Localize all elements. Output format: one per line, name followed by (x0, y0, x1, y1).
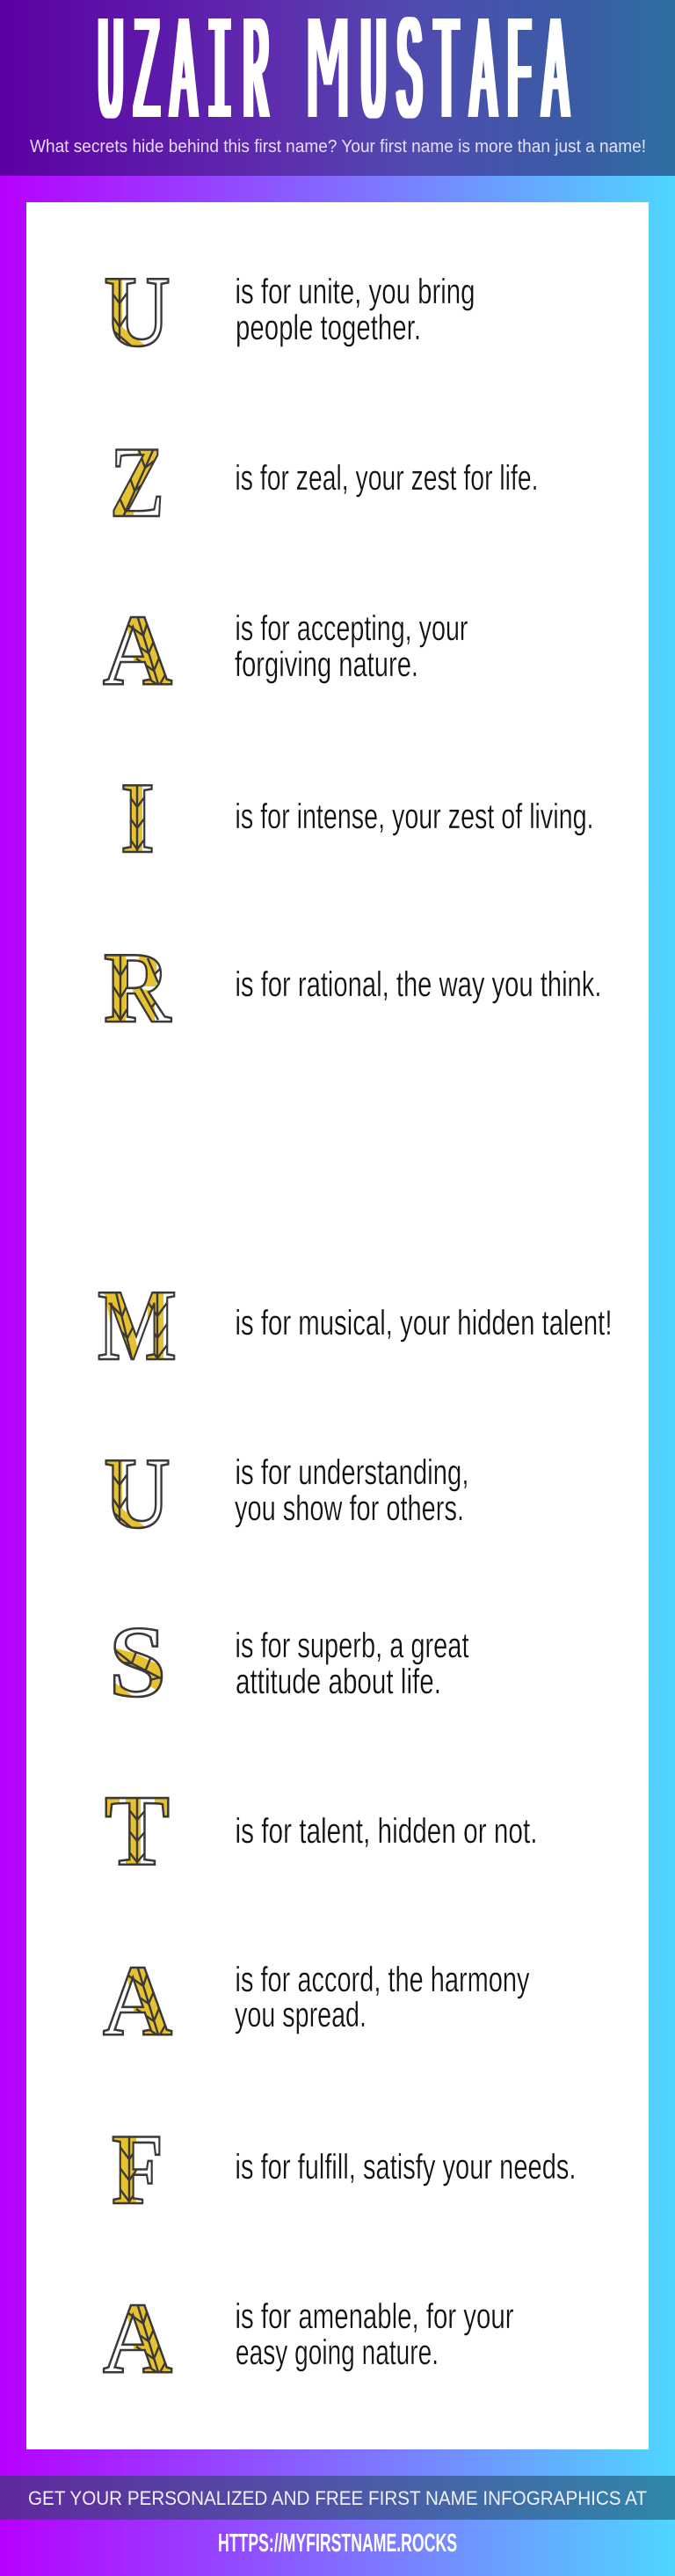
icon: letter T (105, 1797, 170, 1866)
text: A meaning: easy going nature. (236, 2333, 439, 2372)
row: Z (112, 448, 536, 517)
icon: letter A: A (103, 2282, 172, 2395)
row: U (105, 278, 474, 348)
text: A meaning (236, 2297, 513, 2372)
icon: letter F: F (112, 2114, 163, 2226)
text: U meaning: is for understanding, (236, 1453, 469, 1492)
text: S meaning (236, 1626, 469, 1701)
row: I (122, 784, 592, 853)
text: A meaning (235, 609, 468, 684)
title (98, 0, 571, 163)
text: A meaning: forgiving nature. (235, 645, 418, 684)
text: U meaning: you show for others. (235, 1489, 464, 1528)
row: A (third) (102, 2303, 513, 2374)
text: A meaning: is for accord, the harmony (236, 1961, 529, 1999)
row: A (102, 615, 468, 686)
icon: letter A (102, 615, 172, 686)
text: A meaning: is for amenable, for your (236, 2297, 513, 2336)
text: Z meaning: is for zeal, your zest for life. (236, 459, 538, 498)
icon: letter S: S (109, 1606, 166, 1719)
text: T meaning: is for talent, hidden or not. (236, 1812, 538, 1851)
subtitle: What secrets hide behind this first name? Your first name is more than just a name! (30, 137, 646, 156)
icon: letter F (112, 2136, 160, 2205)
row: U (second) (105, 1459, 467, 1530)
icon: letter R: R (104, 932, 171, 1044)
text: A meaning: you spread. (235, 1996, 367, 2034)
row: S (112, 1626, 469, 1699)
text: U meaning (236, 273, 475, 347)
footer url: HTTPS://MYFIRSTNAME.ROCKS (218, 2529, 457, 2558)
text: U meaning (235, 1453, 469, 1528)
icon: letter U (105, 1459, 170, 1530)
icon: letter Z: Z (110, 426, 164, 539)
icon: letter R (104, 954, 172, 1023)
row: M (98, 1292, 610, 1361)
text: A meaning: is for accepting, your (236, 609, 468, 648)
icon: letter I: I (120, 762, 155, 875)
icon: letter M: M (98, 1270, 177, 1382)
footer strip (0, 2476, 675, 2520)
icon: letter A: A (103, 1945, 172, 2057)
icon: letter S (112, 1626, 163, 1699)
row: R (104, 954, 599, 1023)
row: A (second) (102, 1966, 529, 2036)
icon: letter U (105, 278, 170, 348)
row: T (105, 1797, 535, 1866)
icon: letter M (98, 1292, 176, 1361)
icon: letter U: U (104, 256, 171, 368)
header band (0, 0, 675, 176)
icon: letter Z (112, 448, 162, 517)
icon: letter U: U (104, 1437, 171, 1550)
icon: letter A (102, 1966, 172, 2036)
text: A meaning (235, 1961, 529, 2034)
icon: letter A (102, 2303, 172, 2374)
icon: letter I (122, 784, 153, 853)
text: S meaning: attitude about life. (236, 1663, 441, 1701)
text: S meaning: is for superb, a great (236, 1626, 469, 1665)
text: U meaning: is for unite, you bring (236, 273, 475, 311)
icon: letter T: T (105, 1775, 170, 1888)
icon: letter A: A (103, 594, 172, 707)
row: F (112, 2136, 574, 2205)
text: U meaning: people together. (236, 309, 421, 347)
